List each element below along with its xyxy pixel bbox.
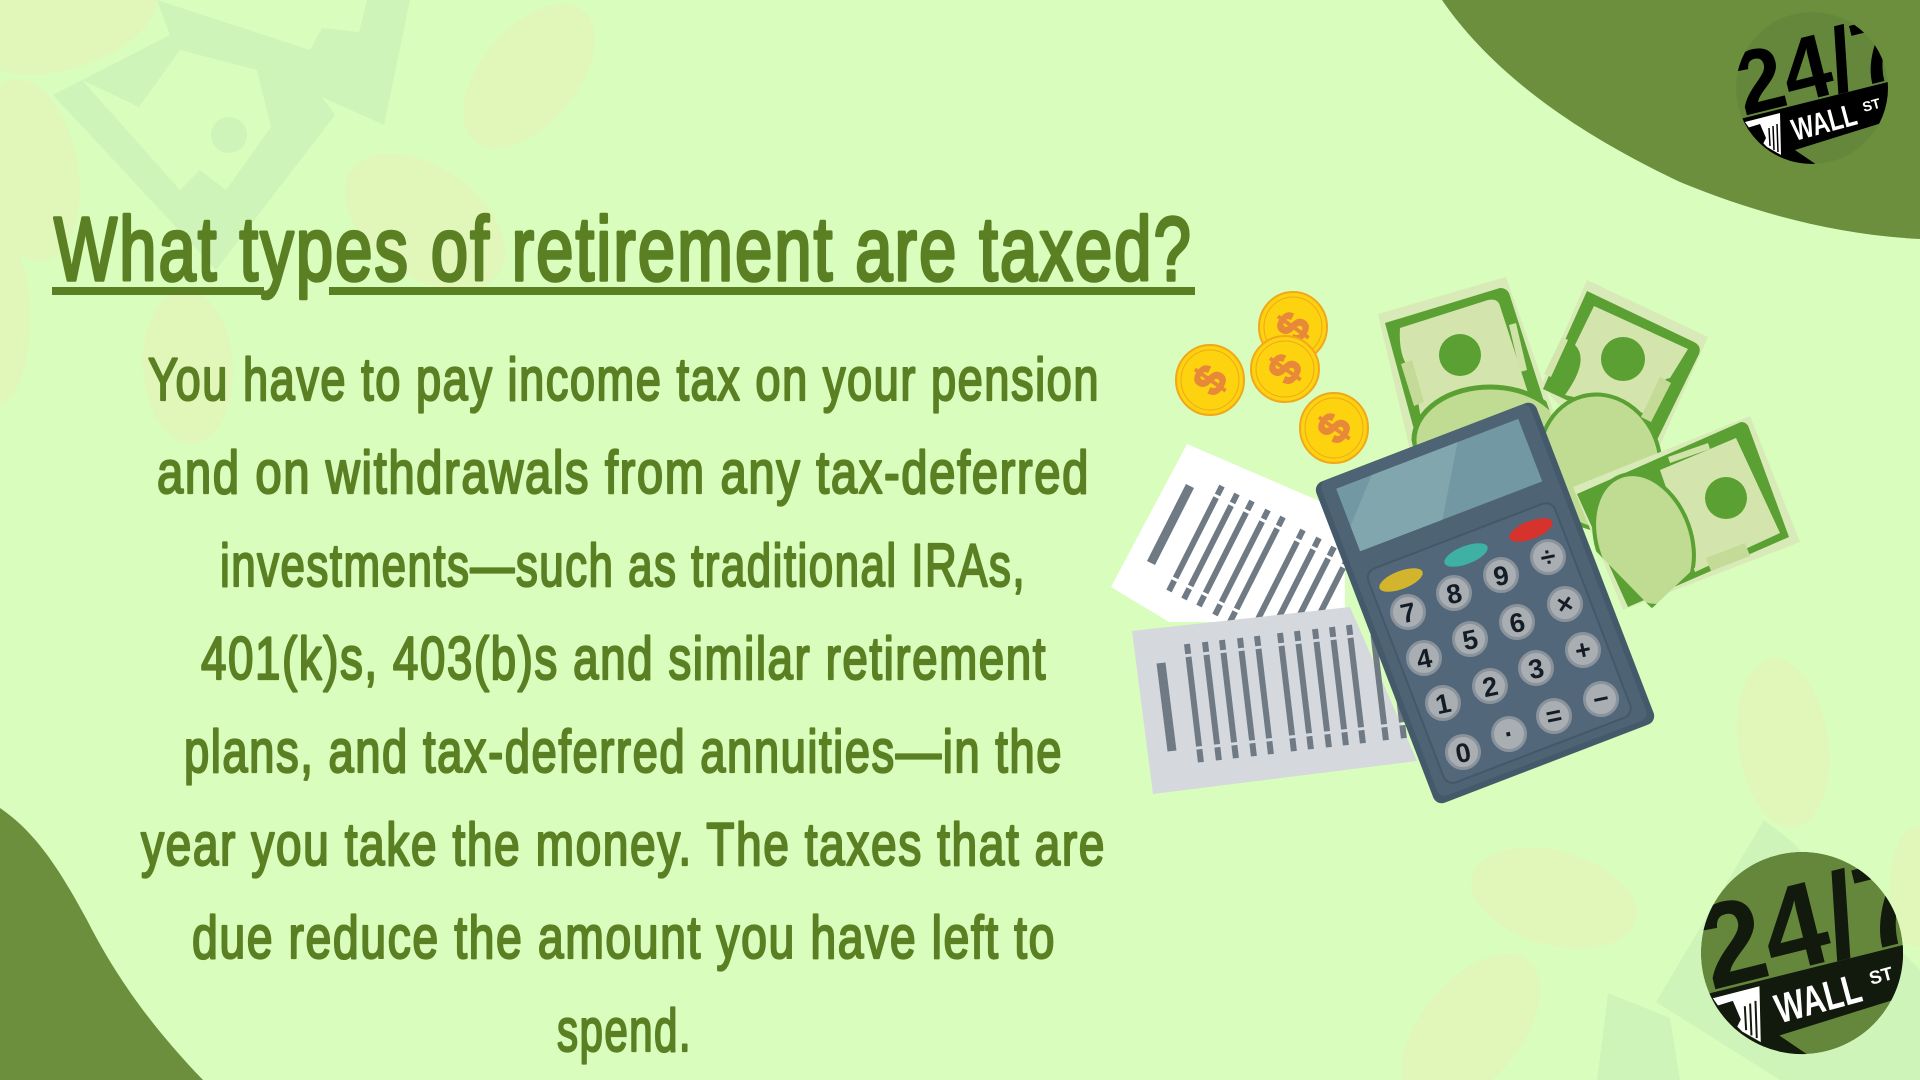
body text block: investments—such as traditional IRAs, bbox=[220, 532, 1026, 599]
calculator bbox=[1313, 400, 1657, 806]
keypad: 6 bbox=[1507, 607, 1528, 639]
body text block: 401(k)s, 403(b)s and similar retirement bbox=[201, 625, 1047, 692]
keypad: · bbox=[1501, 718, 1517, 750]
receipt: grey bbox=[1132, 607, 1417, 794]
illustration: money, coins, receipts and calculator bbox=[1111, 0, 1920, 1055]
keypad: = bbox=[1543, 700, 1565, 732]
logo: 24/7 Wall St, bottom right: ST bbox=[1867, 962, 1896, 989]
keypad: 0 bbox=[1453, 737, 1474, 769]
keypad: 1 bbox=[1433, 688, 1454, 720]
keypad: 5 bbox=[1460, 624, 1481, 656]
keypad: + bbox=[1572, 634, 1594, 666]
coin: front: $ bbox=[1258, 345, 1313, 393]
coin: right: $ bbox=[1307, 404, 1362, 452]
body text block: due reduce the amount you have left to bbox=[192, 904, 1056, 971]
logo: 24/7 Wall St, top right: WALL bbox=[1788, 97, 1861, 148]
body text block: You have to pay income tax on your pension bbox=[148, 346, 1100, 413]
receipt: white bbox=[1111, 444, 1349, 661]
keypad: 3 bbox=[1526, 653, 1547, 685]
logo: 24/7 Wall St, bottom right: WALL bbox=[1770, 965, 1867, 1032]
coin: left bbox=[1176, 345, 1244, 415]
keypad: 4 bbox=[1414, 643, 1435, 675]
coin: front bbox=[1251, 336, 1319, 402]
keypad: 2 bbox=[1480, 671, 1501, 703]
keypad: 8 bbox=[1444, 578, 1465, 610]
function buttons bbox=[1376, 513, 1556, 597]
bill: lower right bbox=[1573, 416, 1800, 620]
bill: top left bbox=[1378, 277, 1554, 448]
logo: 24/7 Wall St, top right: 24/7 bbox=[1725, 0, 1912, 135]
body text block: plans, and tax-deferred annuities—in the bbox=[184, 718, 1063, 785]
keypad: 7 bbox=[1398, 597, 1419, 629]
body text block: spend. bbox=[557, 997, 692, 1064]
keypad: 9 bbox=[1491, 560, 1512, 592]
keypad: × bbox=[1554, 588, 1576, 620]
logo: 24/7 Wall St, top right: ST bbox=[1861, 95, 1882, 115]
bill: top right bbox=[1524, 280, 1708, 543]
body text block bbox=[141, 346, 1106, 1064]
decorative corner: bottom left bbox=[0, 808, 203, 1080]
logo: 24/7 Wall St, bottom right bbox=[1701, 852, 1904, 1054]
coin: left: $ bbox=[1183, 356, 1238, 404]
keypad: ÷ bbox=[1538, 541, 1559, 573]
body text block: and on withdrawals from any tax-deferred bbox=[157, 439, 1090, 506]
logo: 24/7 Wall St, top right bbox=[1737, 12, 1888, 164]
calculator screen bbox=[1336, 419, 1542, 551]
body text block: year you take the money. The taxes that are bbox=[141, 811, 1106, 878]
keypad: − bbox=[1590, 683, 1612, 715]
decorative corner: top right bbox=[1442, 0, 1920, 239]
title: What types of retirement are taxed? bbox=[54, 200, 1193, 300]
keypad bbox=[1392, 540, 1618, 769]
coin: back: $ bbox=[1266, 303, 1321, 351]
coin: back bbox=[1259, 292, 1327, 362]
calculator body bbox=[1313, 400, 1657, 806]
coin: right bbox=[1300, 393, 1368, 463]
